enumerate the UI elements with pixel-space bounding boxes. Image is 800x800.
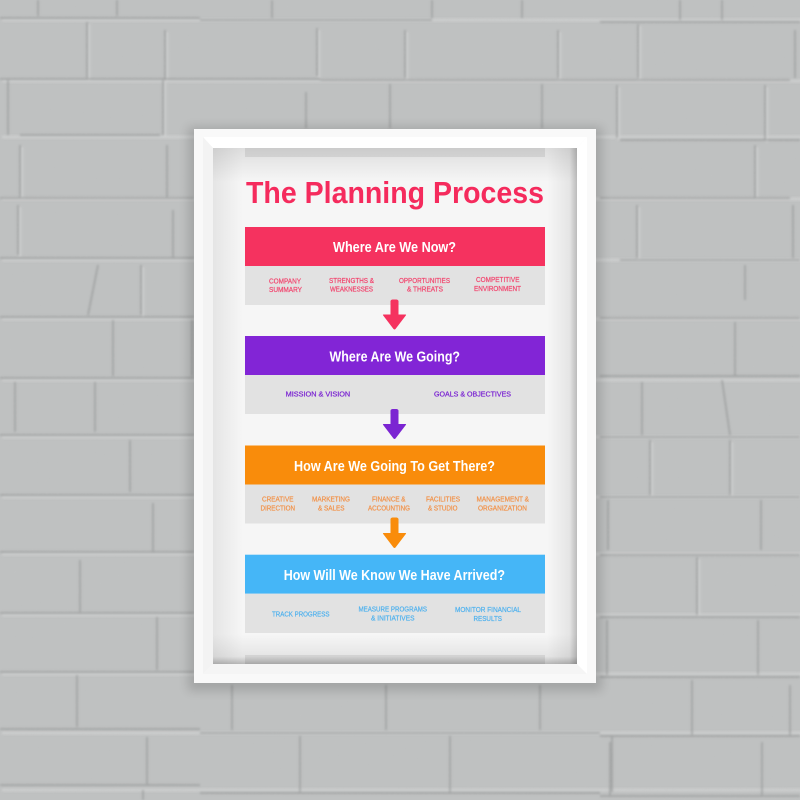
top edge strip: [245, 148, 545, 157]
header bar: [245, 227, 545, 266]
sub items band: MARKETING: [312, 496, 350, 504]
poster sheet: [245, 148, 545, 664]
frame inner shadow: [213, 148, 577, 664]
sub items band: OPPORTUNITIES: [399, 278, 450, 285]
sub items band: MANAGEMENT &: [476, 496, 529, 504]
sub items band: ACCOUNTING: [368, 506, 410, 512]
arrow: orange: [383, 517, 406, 548]
sub items band: DIRECTION: [260, 506, 295, 512]
heading: Where Are We Going?: [330, 350, 460, 366]
sub items band: COMPANY: [269, 278, 301, 286]
right mortar: [600, 22, 800, 796]
sub items band: WEAKNESSES: [330, 286, 373, 294]
sub items band: CREATIVE: [262, 496, 294, 504]
sub items band: ORGANIZATION: [478, 506, 527, 512]
sub items band: [245, 266, 545, 305]
header bar: [245, 555, 545, 594]
bottom edge strip: [245, 655, 545, 664]
sub items band: TRACK PROGRESS: [272, 612, 330, 618]
title: The Planning Process: [246, 175, 544, 210]
sub items band: COMPETITIVE: [476, 277, 520, 284]
sub items band: GOALS & OBJECTIVES: [434, 392, 511, 398]
heading: Where Are We Now?: [333, 240, 456, 256]
sub items band: STRENGTHS &: [329, 278, 374, 285]
arrow: pink: [383, 299, 406, 329]
bottom mortar: [200, 685, 612, 793]
header bar: [245, 336, 545, 375]
panel: how will we know we have arrived: [245, 555, 545, 633]
sub items band: & INITIATIVES: [371, 616, 415, 622]
sub items band: FINANCE &: [372, 496, 406, 504]
sub items band: & THREATS: [407, 286, 443, 294]
panel: where are we now: [245, 227, 545, 305]
left mortar: [0, 18, 320, 785]
sub items band: & SALES: [318, 506, 345, 512]
header bar: [245, 446, 545, 484]
sub items band: & STUDIO: [428, 506, 458, 512]
heading: How Will We Know We Have Arrived?: [284, 568, 505, 584]
sub items band: FACILITIES: [426, 496, 460, 504]
sub items band: MONITOR FINANCIAL: [455, 607, 521, 614]
sub items band: RESULTS: [474, 616, 502, 623]
sub items band: MISSION & VISION: [286, 392, 350, 398]
sub items band: [245, 484, 545, 524]
sub items band: MEASURE PROGRAMS: [358, 606, 427, 614]
sub items band: ENVIRONMENT: [474, 286, 522, 293]
arrow: purple: [383, 409, 406, 439]
sub items band: [245, 594, 545, 633]
sub items band: SUMMARY: [269, 287, 302, 294]
poster frame: [194, 129, 596, 683]
panel: where are we going: [245, 336, 545, 414]
sub items band: [245, 375, 545, 414]
panel: how are we going to get there: [245, 446, 545, 524]
heading: How Are We Going To Get There?: [294, 459, 495, 475]
top mortar: [200, 0, 600, 128]
frame shadow: [188, 127, 602, 691]
